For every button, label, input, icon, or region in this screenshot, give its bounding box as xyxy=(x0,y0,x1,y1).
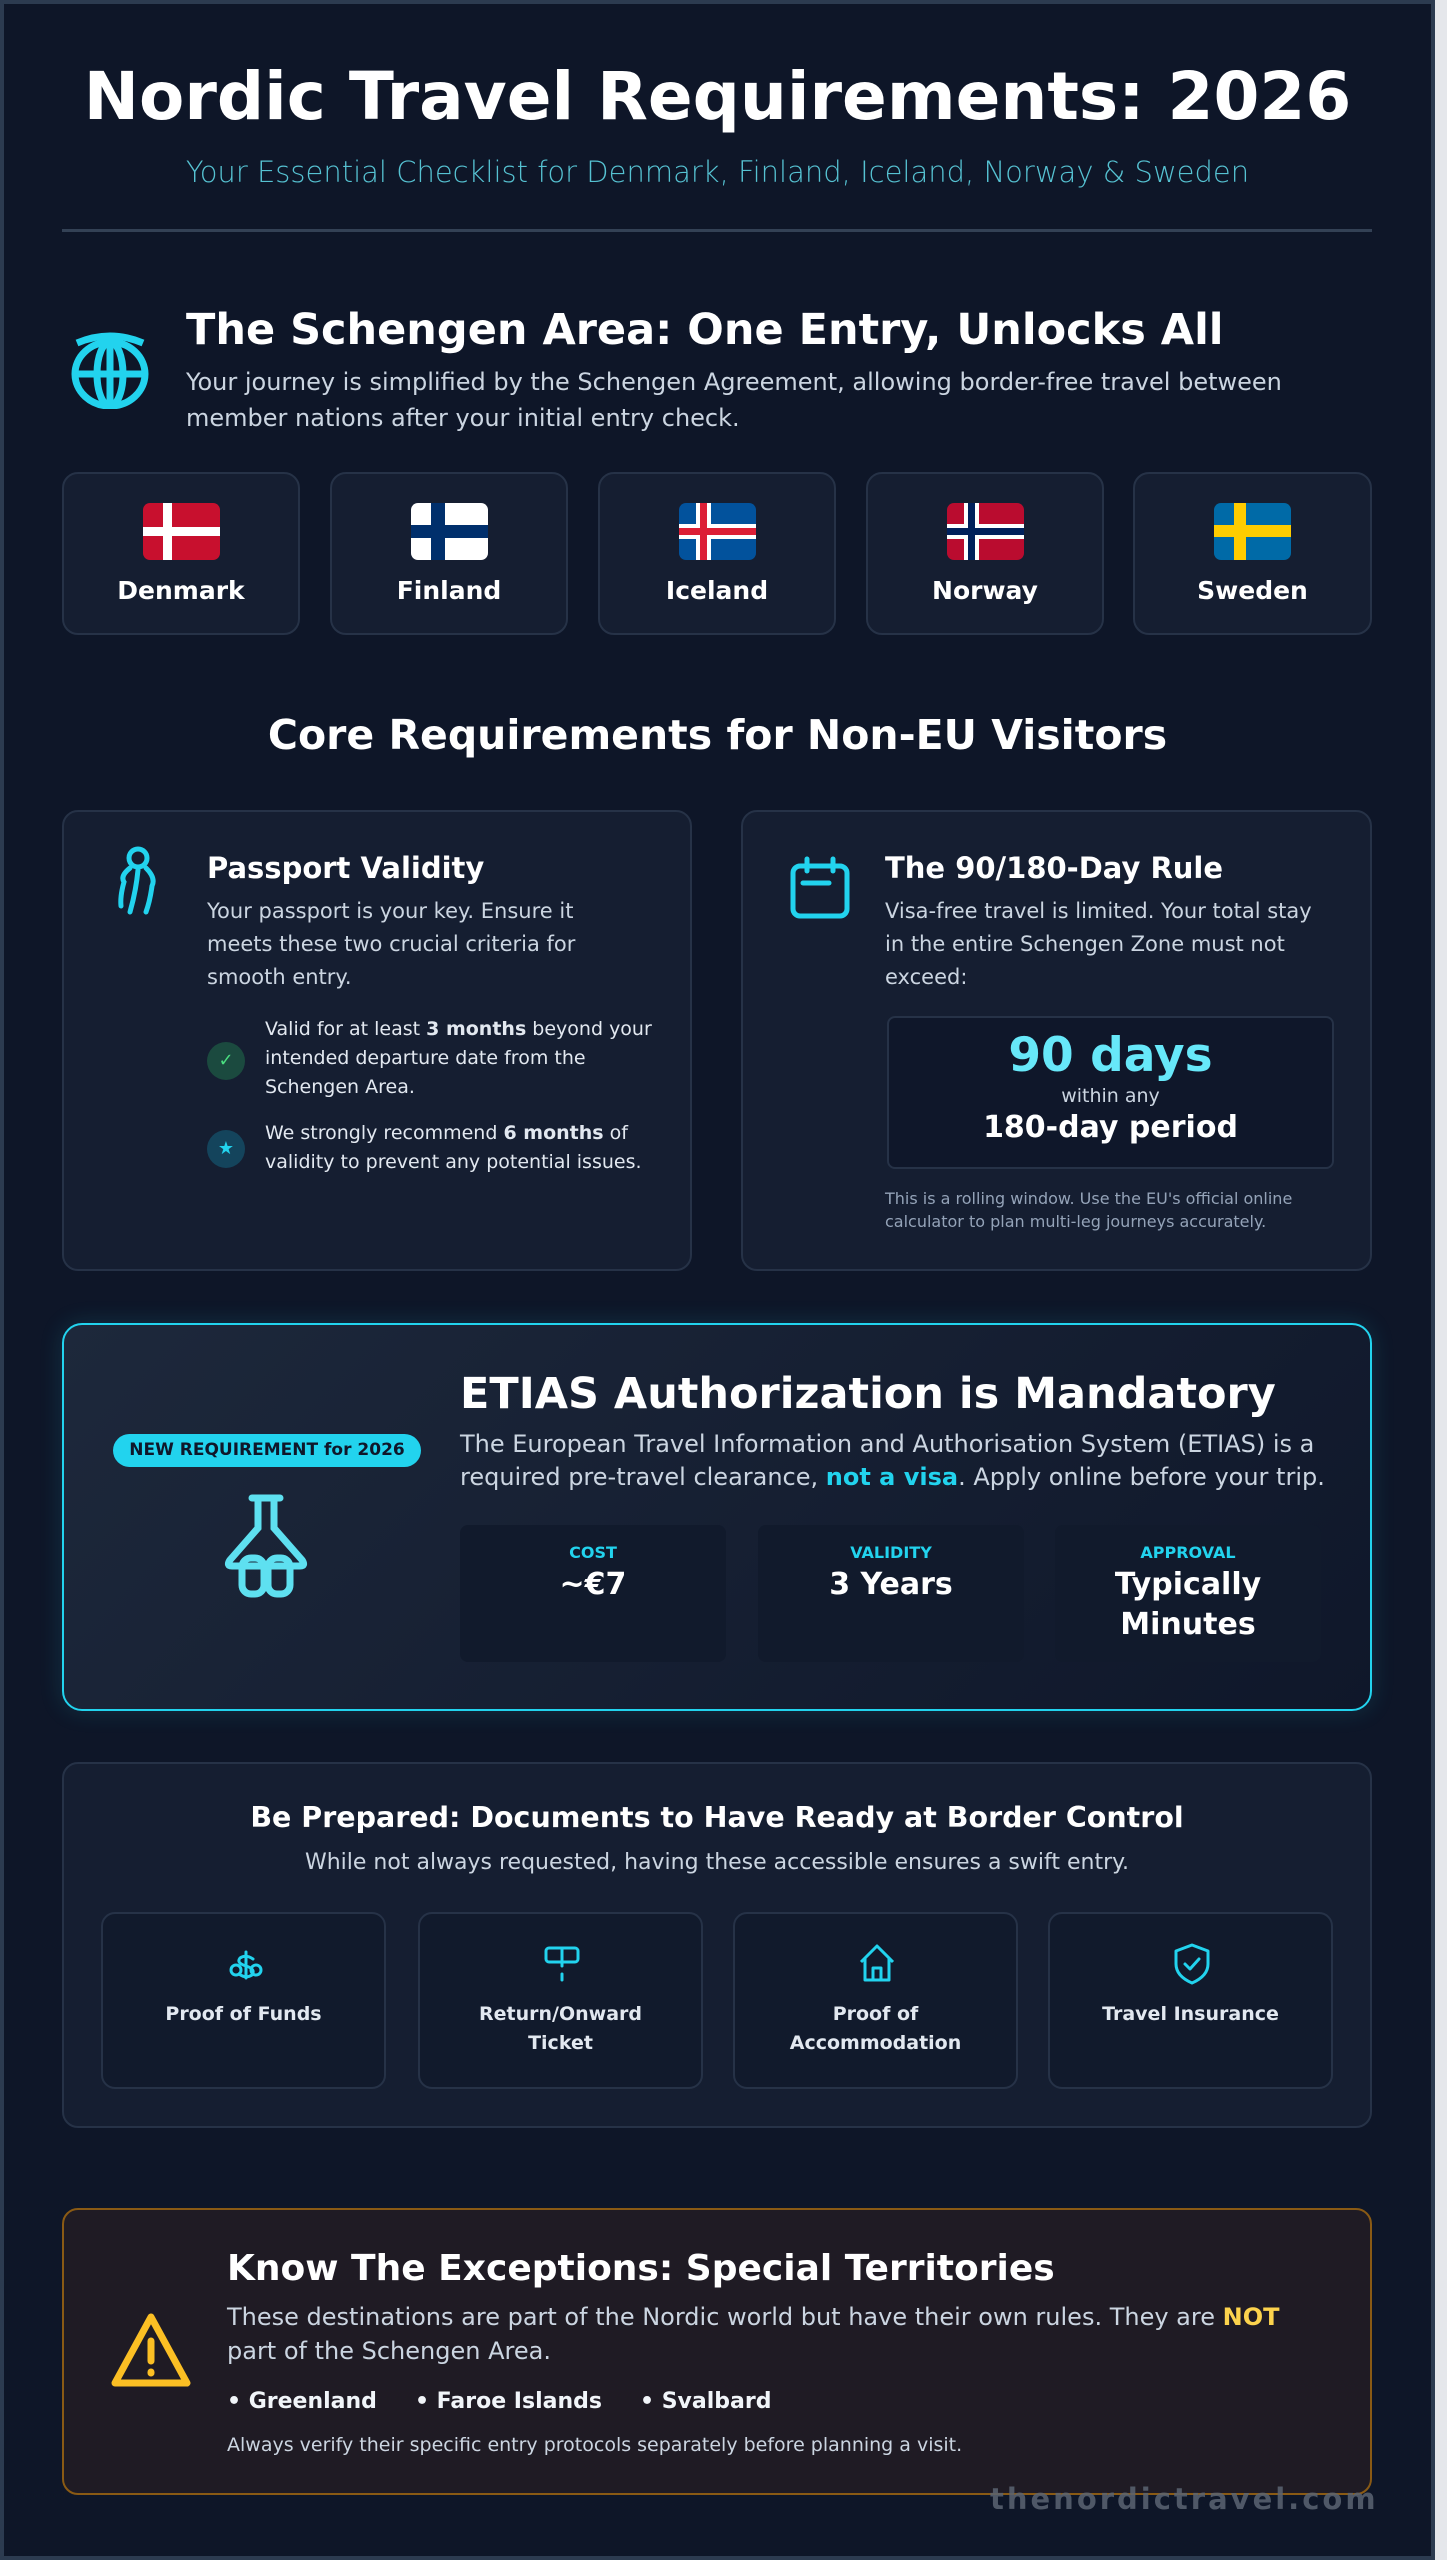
stat: approval: Typically xyxy=(1115,1567,1261,1602)
bullet: 6 months: We strongly recommend 6 months of validity to prevent any potential issues. xyxy=(265,1122,642,1173)
doc card: ticket: Return/Onward xyxy=(479,2003,642,2025)
flag card: Iceland: Iceland xyxy=(666,576,768,605)
title: Nordic Travel Requirements: 2026 xyxy=(84,58,1351,135)
callout: 90 days xyxy=(887,1016,1334,1169)
doc card: insurance xyxy=(1048,1912,1333,2089)
stat: approval: APPROVAL xyxy=(1140,1543,1236,1562)
flag card: Iceland xyxy=(598,472,836,635)
callout: 90 days: 90 days xyxy=(1008,1028,1213,1083)
flag card: Denmark xyxy=(62,472,300,635)
bullet: 3 months: Valid for at least 3 months beyond your intended departure date from the Schengen Area. xyxy=(265,1018,652,1098)
panel: documents xyxy=(62,1762,1372,2128)
flag card: Norway xyxy=(866,472,1104,635)
heading: schengen: The Schengen Area: One Entry, Unlocks All xyxy=(186,305,1224,355)
bullet: 6 months: ★ xyxy=(218,1138,234,1159)
icon: flask xyxy=(224,1494,308,1598)
doc card: funds xyxy=(101,1912,386,2089)
icon: passport xyxy=(118,846,156,914)
stat: cost xyxy=(460,1525,726,1662)
flag card: Denmark: Denmark xyxy=(117,576,245,605)
doc card: funds: Proof of Funds xyxy=(165,2003,322,2025)
bullet: 3 months: ✓ xyxy=(218,1050,234,1071)
text: schengen intro: Your journey is simplified by the Schengen Agreement, allowing border-free travel between member nations after your initial entry check. xyxy=(186,368,1282,432)
flag card: Norway: Norway xyxy=(932,576,1038,605)
badge: new requirement: NEW REQUIREMENT for 2026 xyxy=(129,1440,405,1460)
list: territories: • Greenland • Faroe Islands • Svalbard xyxy=(227,2389,771,2414)
stat: validity xyxy=(758,1525,1024,1662)
text: verify note: Always verify their specific entry protocols separately before planning a visit. xyxy=(227,2434,962,2456)
callout: 90 days: within any xyxy=(1061,1085,1160,1107)
panel: ETIAS xyxy=(62,1323,1372,1711)
stat: cost: COST xyxy=(569,1543,617,1562)
stat: cost: ~€7 xyxy=(560,1567,626,1602)
icon: warning xyxy=(112,2314,190,2386)
doc card: accommodation: Proof of xyxy=(833,2003,918,2025)
doc card: insurance: Travel Insurance xyxy=(1102,2003,1279,2025)
icon: globe xyxy=(72,332,148,409)
text: passport intro: Your passport is your key. Ensure it meets these two crucial criteria for smooth entry. xyxy=(207,899,575,989)
heading: documents: Be Prepared: Documents to Have Ready at Border Control xyxy=(250,1801,1184,1834)
flag card: Finland: Finland xyxy=(397,576,501,605)
text: rolling window note: This is a rolling window. Use the EU's official online calculator to plan multi-leg journeys accurately. xyxy=(885,1189,1292,1231)
flag card: Finland xyxy=(330,472,568,635)
badge: new requirement xyxy=(113,1434,421,1467)
flag card: Sweden: Sweden xyxy=(1197,576,1308,605)
stat: validity: 3 Years xyxy=(829,1567,953,1602)
icon: calendar xyxy=(790,856,850,918)
stat: approval xyxy=(1055,1525,1321,1662)
doc card: ticket xyxy=(418,1912,703,2089)
subtitle: Your Essential Checklist for Denmark, Finland, Iceland, Norway & Sweden xyxy=(186,155,1249,189)
flag card: Sweden xyxy=(1133,472,1372,635)
panel: 90/180 rule xyxy=(741,810,1372,1271)
text: documents subtitle: While not always requested, having these accessible ensures a swift entry. xyxy=(305,1850,1129,1875)
doc card: accommodation xyxy=(733,1912,1018,2089)
heading: exceptions: Know The Exceptions: Special Territories xyxy=(227,2248,1055,2289)
heading: 90/180: The 90/180-Day Rule xyxy=(885,851,1223,885)
callout: 90 days: 180-day period xyxy=(983,1110,1238,1145)
stat: validity: VALIDITY xyxy=(850,1543,932,1562)
doc card: ticket: Ticket xyxy=(528,2032,593,2054)
text: ETIAS description: The European Travel Information and Authorisation System (ETIAS) is a required pre-travel clearance, not a visa. Apply online before your trip. xyxy=(460,1430,1325,1491)
watermark: thenordictravel.com xyxy=(990,2482,1379,2516)
panel: passport validity xyxy=(62,810,692,1271)
heading: core requirements: Core Requirements for Non-EU Visitors xyxy=(268,711,1167,759)
text: 90/180 intro: Visa-free travel is limited. Your total stay in the entire Schengen Zone must not exceed: xyxy=(885,899,1312,989)
heading: passport: Passport Validity xyxy=(207,851,484,885)
stat: approval: Minutes xyxy=(1120,1607,1256,1642)
heading: ETIAS: ETIAS Authorization is Mandatory xyxy=(460,1369,1276,1419)
text: exceptions description: These destinations are part of the Nordic world but have their own rules. They are NOT part of the Schengen Area. xyxy=(227,2303,1279,2365)
panel: exceptions xyxy=(62,2208,1372,2495)
doc card: accommodation: Accommodation xyxy=(790,2032,961,2054)
